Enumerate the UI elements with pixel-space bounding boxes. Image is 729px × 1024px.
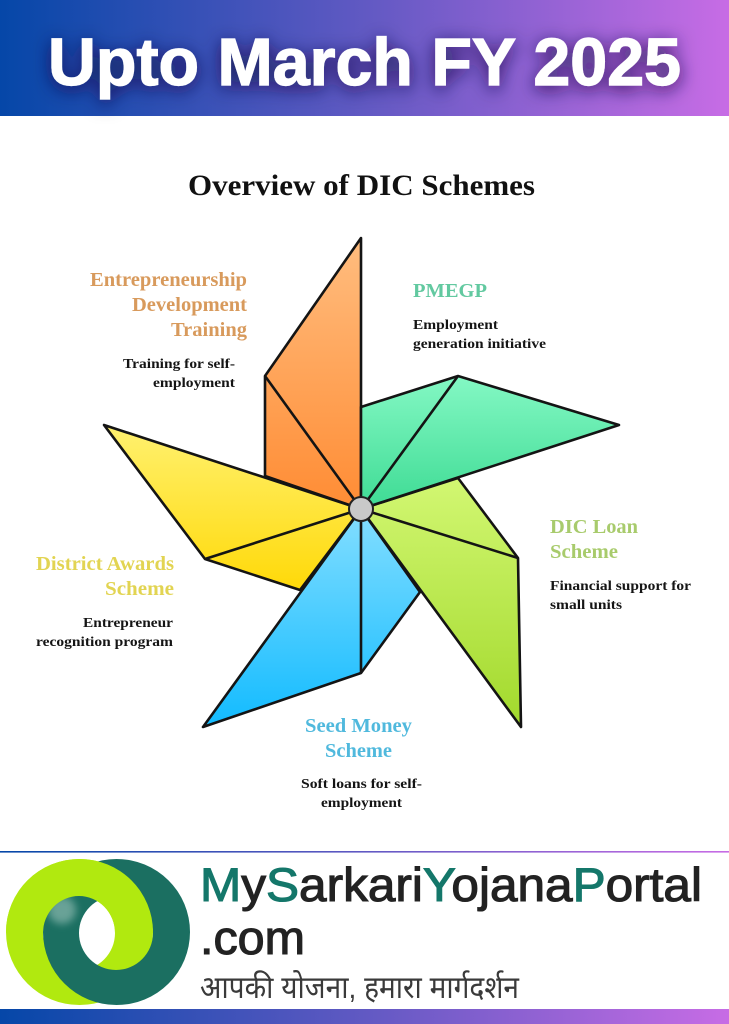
- label: DIC Loan Scheme: small units: [550, 598, 623, 613]
- footer gradient bar: [0, 1009, 729, 1024]
- pinwheel diagram: [104, 238, 619, 727]
- label: Entrepreneurship Development Training: [90, 269, 247, 391]
- label: Entrepreneurship Development Training: Development: [132, 294, 247, 316]
- petal: yellow: [104, 425, 361, 590]
- petal: green: [361, 376, 619, 509]
- label: PMEGP: Employment: [413, 318, 498, 333]
- logo domain suffix: .com: [200, 911, 305, 964]
- label: Seed Money Scheme: employment: [321, 796, 402, 811]
- label: Seed Money Scheme: Seed Money: [305, 715, 412, 737]
- label: Entrepreneurship Development Training: Entrepreneurship: [90, 269, 247, 291]
- label: PMEGP: generation initiative: [413, 337, 546, 352]
- petal: lime: [361, 478, 521, 727]
- logo wordmark: MySarkariYojanaPortal: [200, 858, 702, 911]
- label: DIC Loan Scheme: [550, 516, 691, 613]
- label: Seed Money Scheme: [301, 715, 422, 811]
- label: District Awards Scheme: recognition program: [36, 635, 173, 650]
- label: Seed Money Scheme: Soft loans for self-: [301, 777, 422, 792]
- label: Seed Money Scheme: Scheme: [325, 740, 392, 762]
- label: District Awards Scheme: [36, 553, 174, 650]
- header banner: [0, 0, 729, 116]
- petal: blue: [203, 509, 420, 727]
- chart title: Overview of DIC Schemes: [188, 169, 535, 202]
- label: DIC Loan Scheme: DIC Loan: [550, 516, 638, 538]
- label: District Awards Scheme: Scheme: [105, 578, 174, 600]
- label: PMEGP: [413, 280, 546, 352]
- center hub: [349, 497, 373, 521]
- banner title: Upto March FY 2025: [48, 25, 681, 100]
- logo icon: [6, 859, 190, 1005]
- label: DIC Loan Scheme: Scheme: [550, 541, 618, 563]
- label: Entrepreneurship Development Training: employment: [153, 376, 235, 391]
- label: PMEGP: PMEGP: [413, 280, 487, 302]
- label: Entrepreneurship Development Training: Training: [171, 319, 247, 341]
- label: Entrepreneurship Development Training: Training for self-: [123, 357, 235, 372]
- label: District Awards Scheme: Entrepreneur: [83, 616, 173, 631]
- petal: orange: [265, 238, 361, 509]
- label: DIC Loan Scheme: Financial support for: [550, 579, 691, 594]
- logo tagline: आपकी योजना, हमारा मार्गदर्शन: [200, 970, 520, 1005]
- footer divider line: [0, 851, 729, 853]
- label: District Awards Scheme: District Awards: [36, 553, 174, 575]
